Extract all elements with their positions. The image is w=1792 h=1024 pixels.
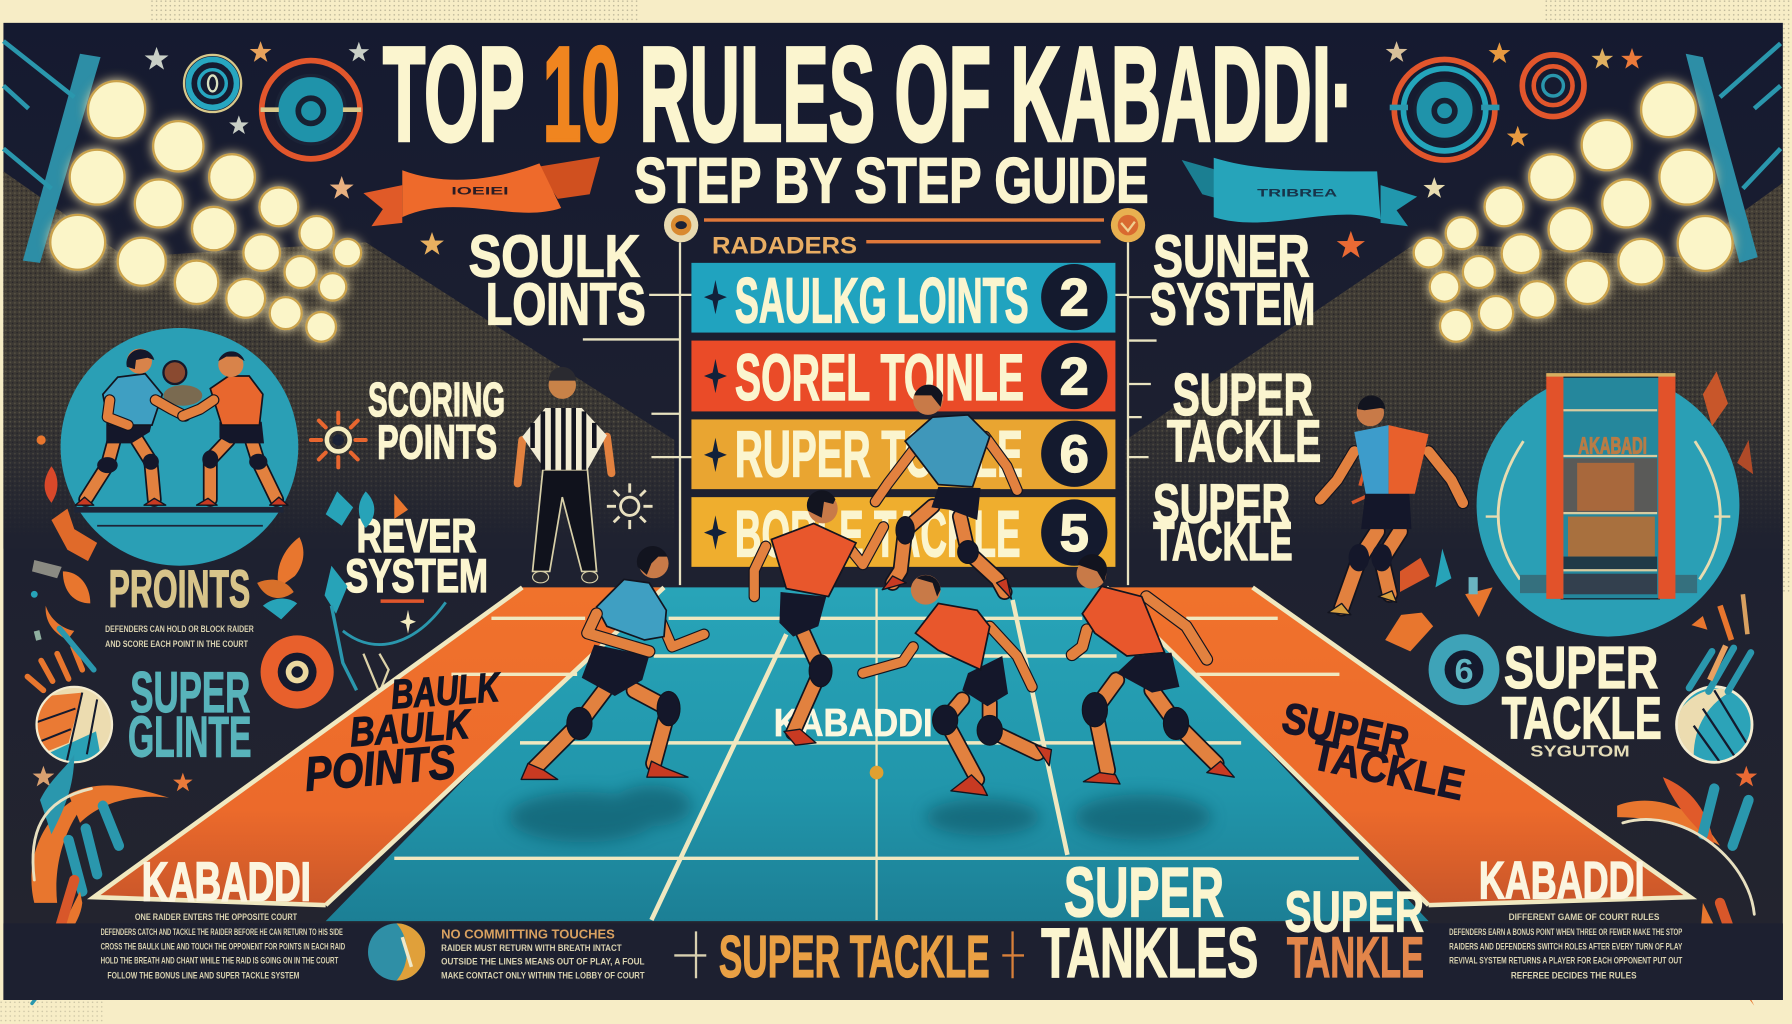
bottom bar: [3, 923, 1783, 1000]
icon: badge bottom: [368, 923, 425, 981]
court label: super tackle: SUPER: [1278, 694, 1413, 768]
emblem: right small target: [1522, 55, 1584, 117]
floor shadows: [509, 785, 1211, 842]
orange ribbon: IOEIEI: [451, 185, 509, 197]
row 1: SAULKG LOINTS: [735, 264, 1029, 336]
icon: teal number six: 6: [1454, 652, 1474, 690]
icon: sun: [311, 413, 366, 467]
row 4: 5: [1060, 504, 1089, 563]
side label: scoring points: POINTS: [377, 416, 497, 469]
small text block right: RAIDERS AND DEFENDERS SWITCH ROLES AFTER EVERY TURN OF PLAY: [1449, 942, 1682, 952]
small caption left: [105, 624, 254, 649]
player: blue raider centre: [875, 385, 1017, 599]
small text block right: REFEREE DECIDES THE RULES: [1511, 970, 1637, 980]
icon: orange target: [261, 635, 334, 709]
side label: super tackle lower: TACKLE: [1153, 510, 1293, 572]
small text block centre: RAIDER MUST RETURN WITH BREATH INTACT: [441, 943, 622, 953]
pole emblem right: [1111, 208, 1145, 242]
court: [94, 587, 1690, 921]
left scene circle: wrestlers: [61, 328, 298, 566]
super tankles big: TANKLES: [1041, 914, 1258, 993]
court label: baulk baulk points: POINTS: [303, 736, 458, 802]
side label: super tackle upper: TACKLE: [1167, 408, 1321, 475]
court label: super tackle: TACKLE: [1308, 731, 1469, 810]
pole emblem left: [664, 208, 698, 242]
small text block centre: NO COMMITTING TOUCHES: [441, 927, 615, 941]
icon: cross marker right: [1002, 931, 1024, 978]
stars: [33, 41, 1757, 791]
super tankles big: SUPER: [1064, 854, 1224, 933]
emblem: right large target: [1390, 59, 1499, 160]
palm leaves left: [31, 754, 169, 1003]
small text block right: DIFFERENT GAME OF COURT RULES: [1509, 912, 1659, 922]
icon: volleyball right: [1677, 687, 1752, 762]
small caption left: AND SCORE EACH POINT IN THE COURT: [105, 639, 248, 649]
side label: soulk loints: SOULK: [469, 223, 640, 290]
confetti decorations right: [1352, 371, 1753, 809]
player: red defender back: [754, 490, 883, 745]
player: right side raider: [1320, 395, 1463, 615]
side label: super tackle right: TACKLE: [1502, 684, 1662, 751]
row 3: RUPER TOINLE: [735, 418, 1023, 492]
player: red defender centre: [863, 575, 1051, 795]
row 2: SOREL TOINLE: [735, 341, 1024, 415]
teal ribbon: [1182, 158, 1417, 226]
row 1: 2: [1060, 268, 1089, 327]
super tackle bottom: SUPER TACKLE: [719, 923, 990, 990]
small text block left: DEFENDERS CATCH AND TACKLE THE RAIDER BEFORE HE CAN RETURN TO HIS SIDE: [101, 927, 343, 937]
icon: burst beside referee: [607, 483, 653, 529]
player: blue raider left: [521, 546, 704, 779]
right floodlight truss: [1686, 43, 1781, 263]
super tankle small: TANKLE: [1287, 926, 1424, 990]
small text block centre: [441, 927, 645, 980]
left floodlight truss: [3, 41, 101, 263]
side label: rever system: REVER: [357, 510, 477, 562]
court label: baulk baulk points: BAULK: [348, 701, 474, 755]
side label: scoring points: SCORING: [368, 374, 505, 427]
small caption left: DEFENDERS CAN HOLD OR BLOCK RAIDER: [105, 624, 254, 634]
court label: baulk baulk points: [303, 664, 503, 802]
side label: super tackle upper: SUPER: [1173, 361, 1313, 428]
light cone right: [1126, 183, 1783, 549]
referee: [518, 367, 611, 583]
floodlights left: [50, 81, 361, 342]
side label: suner system: SYSTEM: [1150, 271, 1315, 338]
small text block centre: OUTSIDE THE LINES MEANS OUT OF PLAY, A FOUL: [441, 957, 645, 967]
goal sign: AKABADI: [1578, 433, 1647, 459]
right baulk zone: [1106, 587, 1690, 905]
orange wrestler: [183, 351, 288, 505]
icon: volleyball left: [34, 687, 112, 768]
orange ribbon: [363, 157, 600, 226]
side label: super tackle right: SUPER: [1504, 634, 1658, 701]
left baulk zone: [94, 587, 664, 905]
court label: super tackle: [1278, 694, 1469, 810]
floodlights right: [1414, 82, 1733, 342]
side label: super tackle lower: SUPER: [1153, 472, 1290, 534]
small text block left: CROSS THE BAULK LINE AND TOUCH THE OPPONENT FOR POINTS IN EACH RAID: [101, 942, 345, 952]
kabaddi right: KABADDI: [1479, 851, 1645, 910]
court lines: [94, 587, 1690, 920]
side label: soulk loints: LOINTS: [486, 271, 646, 338]
row 3: 6: [1060, 425, 1089, 484]
kabaddi left: KABADDI: [142, 851, 311, 913]
small text block left: HOLD THE BREATH AND CHANT WHILE THE RAID IS GOING ON IN THE COURT: [101, 955, 339, 965]
small text block left: FOLLOW THE BONUS LINE AND SUPER TACKLE SYSTEM: [107, 970, 299, 980]
side label: super glinte: GLINTE: [128, 706, 251, 770]
light cone left: [3, 171, 674, 549]
centre wrestler: [163, 361, 202, 406]
palm leaves right: [1617, 777, 1754, 1006]
row 4: [691, 497, 1115, 572]
small text block centre: MAKE CONTACT ONLY WITHIN THE LOBBY OF COURT: [441, 970, 645, 980]
scoreboard poles and connectors: [583, 242, 1157, 585]
right scene circle: goal frame: [1477, 374, 1739, 637]
small text block right: [1449, 912, 1683, 980]
side label: super glinte: SUPER: [130, 661, 250, 725]
court label: baulk baulk points: BAULK: [389, 664, 503, 718]
subtitle: STEP BY STEP GUIDE: [634, 144, 1149, 216]
teal floor: [326, 587, 1429, 921]
teal ribbon: TRIBREA: [1257, 188, 1337, 200]
super tankle small: SUPER: [1285, 880, 1424, 944]
scoreboard: [691, 263, 1115, 572]
radaders label: RADADERS: [712, 233, 857, 260]
row 4: BORLE TACKLE: [735, 498, 1021, 572]
icon: teal number six: [1429, 634, 1499, 705]
emblem: left small target: [184, 55, 241, 112]
marker: [870, 766, 883, 779]
row 2: 2: [1060, 347, 1089, 406]
side label: suner system: SUNER: [1153, 223, 1310, 290]
board header rules: [704, 218, 1104, 243]
emblem: left large target: [261, 61, 361, 159]
small text block right: REVIVAL SYSTEM RETURNS A PLAYER FOR EACH OPPONENT PUT OUT: [1449, 955, 1683, 965]
icon: cross marker left: [674, 931, 706, 978]
court label: kabaddi: KABADDI: [774, 702, 933, 745]
side label: proints: PROINTS: [109, 560, 250, 619]
small text block left: [101, 912, 345, 980]
blue wrestler: [75, 349, 185, 505]
small text block left: ONE RAIDER ENTERS THE OPPOSITE COURT: [135, 912, 297, 922]
side caption: sygutom: SYGUTOM: [1530, 744, 1630, 761]
side label: rever system: SYSTEM: [345, 550, 488, 602]
player: red defender right: [1072, 554, 1234, 784]
confetti decorations left: [27, 435, 446, 693]
row 1: [691, 263, 1115, 336]
small text block right: DEFENDERS EARN A BONUS POINT WHEN THREE OR FEWER MAKE THE STOP: [1449, 927, 1682, 937]
